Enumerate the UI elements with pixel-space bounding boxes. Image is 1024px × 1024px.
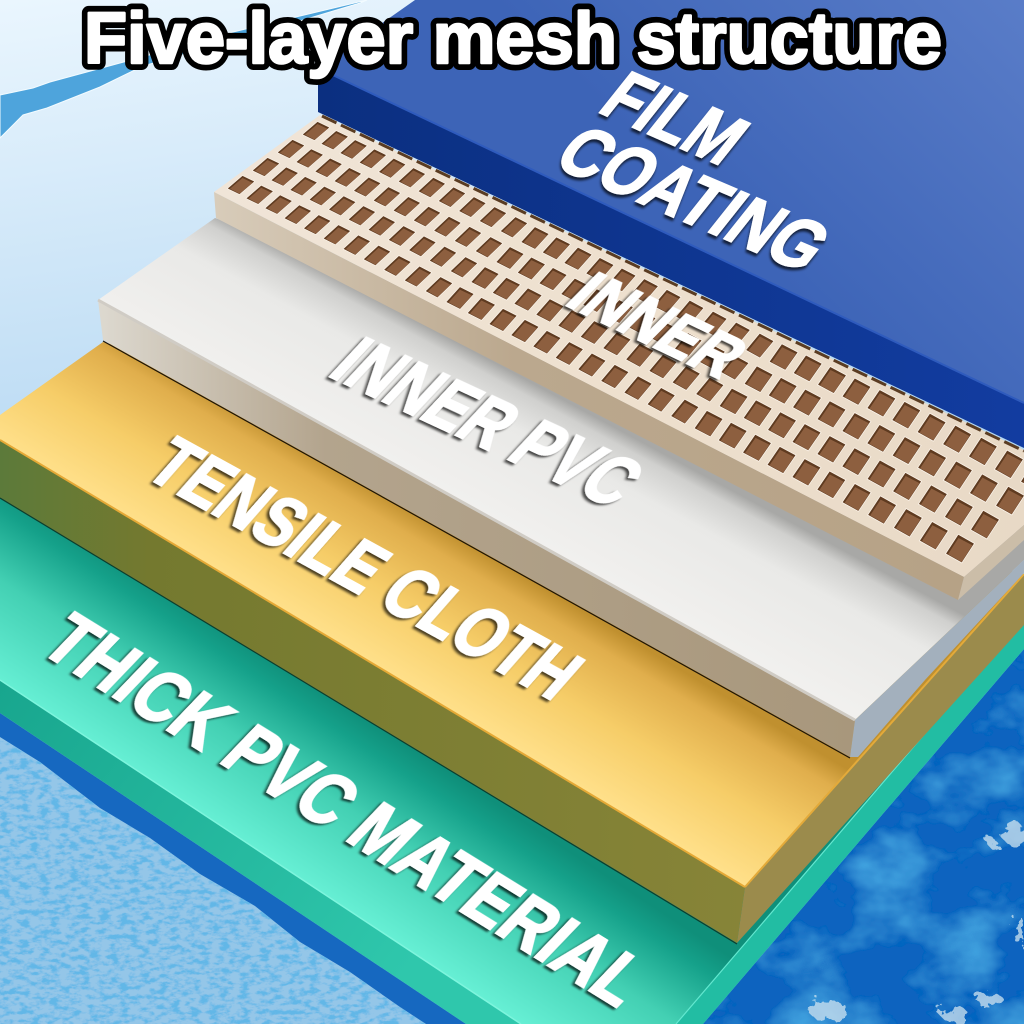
label: inner PVC: INNER PVC — [314, 323, 661, 520]
mesh holes — [228, 122, 1024, 562]
layer: film coating (blue) — [318, 0, 1024, 448]
layer: inner PVC (white) — [98, 218, 1024, 758]
label: film coating: FILM — [585, 58, 764, 179]
label: inner: INNER — [552, 261, 762, 390]
layer: tensile cloth (yellow) — [0, 342, 1024, 944]
water: bottom left pool — [0, 713, 466, 1024]
label: tensile cloth: TENSILE CLOTH — [131, 424, 599, 714]
water stream at top left — [0, 0, 367, 138]
title: Five-layer mesh structure — [84, 0, 942, 79]
water: bottom right pool — [703, 649, 1024, 1024]
layer: inner mesh (beige grid) — [214, 115, 1024, 600]
layer: thick PVC material (teal) — [0, 498, 1024, 1024]
label: film coating — [540, 58, 846, 286]
label: film coating: COATING — [540, 112, 846, 286]
title: Five-layer mesh structure — [84, 0, 942, 79]
